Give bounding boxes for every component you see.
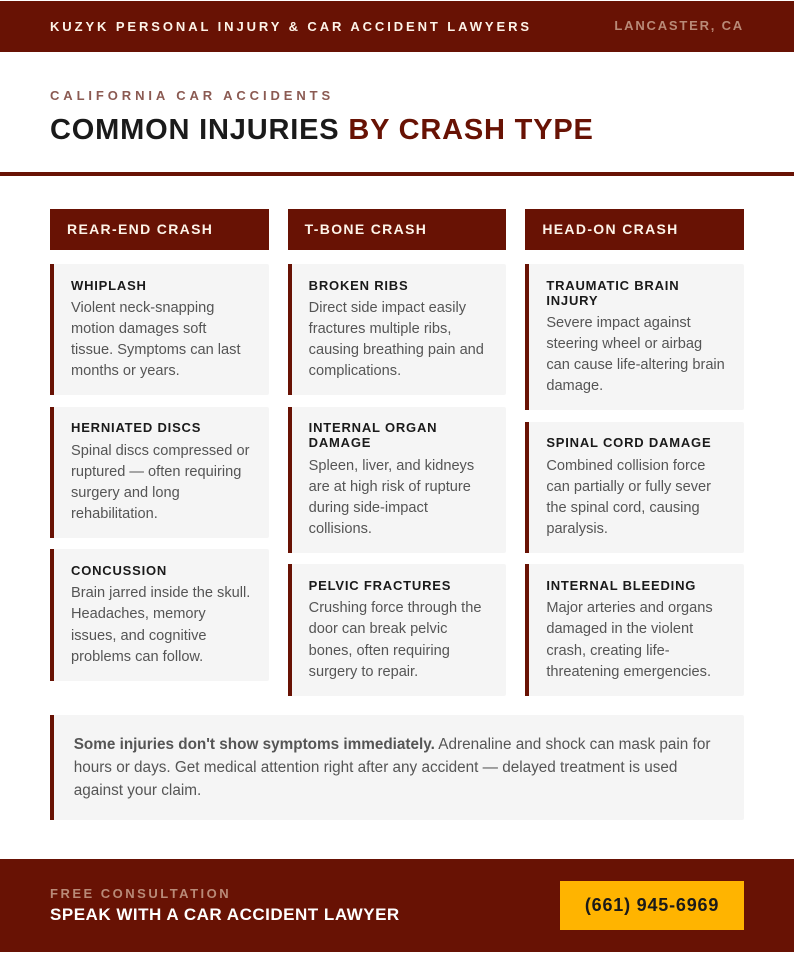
phone button	[560, 881, 744, 930]
footer eyebrow: FREE CONSULTATION	[50, 886, 231, 901]
card: whiplash	[50, 264, 269, 395]
card: herniated discs: HERNIATED DISCS	[71, 420, 201, 435]
card: pelvic fractures: PELVIC FRACTURES	[309, 578, 451, 593]
column heading: t-bone	[288, 209, 506, 250]
card: pelvic fractures: bones, often requiring	[309, 643, 450, 659]
column heading: head-on	[525, 209, 744, 250]
card: spinal cord damage: paralysis.	[546, 521, 608, 537]
card: herniated discs: Spinal discs compressed or	[71, 443, 249, 459]
card: concussion: CONCUSSION	[71, 563, 167, 578]
card: internal organ damage: DAMAGE	[309, 435, 371, 450]
card: traumatic brain injury: Severe impact against	[546, 315, 691, 331]
card: traumatic brain injury: damage.	[546, 378, 603, 394]
column heading: rear-end: REAR-END CRASH	[67, 221, 213, 237]
card: concussion: problems can follow.	[71, 649, 203, 665]
callout: Some injuries don't show symptoms immediately. Adrenaline and shock can mask pain for	[74, 736, 710, 753]
callout: against your claim.	[74, 782, 201, 799]
card: herniated discs	[50, 407, 269, 538]
card: spinal cord damage: Combined collision force	[546, 458, 705, 474]
title rule	[0, 172, 794, 176]
card: spinal cord damage: the spinal cord, causing	[546, 500, 700, 516]
eyebrow: CALIFORNIA CAR ACCIDENTS	[50, 88, 334, 103]
card: whiplash: tissue. Symptoms can last	[71, 342, 241, 358]
card: herniated discs: surgery and long	[71, 485, 180, 501]
card: whiplash: motion damages soft	[71, 321, 206, 337]
card: internal organ damage	[288, 407, 506, 553]
card: herniated discs: ruptured — often requiring	[71, 464, 241, 480]
card: concussion: Headaches, memory	[71, 606, 206, 622]
card: internal bleeding: crash, creating life-	[546, 643, 670, 659]
card: broken ribs: Direct side impact easily	[309, 300, 466, 316]
card: internal organ damage: are at high risk of rupture	[309, 479, 471, 495]
title: COMMON INJURIES BY CRASH TYPE	[50, 114, 594, 146]
column: head-on crash	[525, 209, 744, 696]
card: broken ribs: BROKEN RIBS	[309, 278, 408, 293]
card: concussion: issues, and cognitive	[71, 628, 206, 644]
card: traumatic brain injury: can cause life-altering brain	[546, 357, 725, 373]
card: herniated discs: rehabilitation.	[71, 506, 158, 522]
column heading: t-bone: T-BONE CRASH	[305, 221, 427, 237]
card: internal bleeding: damaged in the violent	[546, 621, 693, 637]
card: broken ribs	[288, 264, 506, 395]
card: whiplash: months or years.	[71, 363, 180, 379]
column: t-bone crash	[288, 209, 506, 696]
card: whiplash: Violent neck-snapping	[71, 300, 214, 316]
column heading: rear-end	[50, 209, 269, 250]
callout: hours or days. Get medical attention right after any accident — delayed treatment is used	[74, 759, 677, 776]
card: internal organ damage: INTERNAL ORGAN	[309, 420, 437, 435]
callout	[50, 715, 744, 820]
card: internal bleeding: threatening emergencies.	[546, 664, 711, 680]
card: traumatic brain injury: TRAUMATIC BRAIN	[546, 278, 679, 293]
column heading: head-on: HEAD-ON CRASH	[542, 221, 679, 237]
footer bar	[0, 859, 794, 952]
footer heading: SPEAK WITH A CAR ACCIDENT LAWYER	[50, 905, 400, 924]
card: broken ribs: causing breathing pain and	[309, 342, 484, 358]
card: concussion	[50, 549, 269, 681]
card: internal bleeding	[525, 564, 744, 696]
card: spinal cord damage: can partially or fully sever	[546, 479, 711, 495]
card: broken ribs: fractures multiple ribs,	[309, 321, 451, 337]
card: traumatic brain injury: steering wheel or airbag	[546, 336, 702, 352]
card: pelvic fractures: door can break pelvic	[309, 621, 447, 637]
card: spinal cord damage: SPINAL CORD DAMAGE	[546, 435, 711, 450]
header bar	[0, 1, 794, 52]
card: broken ribs: complications.	[309, 363, 401, 379]
card: traumatic brain injury: INJURY	[546, 293, 598, 308]
card: pelvic fractures: Crushing force through the	[309, 600, 481, 616]
card: pelvic fractures: surgery to repair.	[309, 664, 418, 680]
card: spinal cord damage	[525, 422, 744, 553]
phone button: (661) 945-6969	[585, 895, 719, 915]
card: internal bleeding: INTERNAL BLEEDING	[546, 578, 696, 593]
card: concussion: Brain jarred inside the skull.	[71, 585, 250, 601]
firm name: KUZYK PERSONAL INJURY & CAR ACCIDENT LAWYERS	[50, 19, 532, 34]
card: internal organ damage: during side-impact	[309, 500, 428, 516]
card: internal bleeding: Major arteries and organs	[546, 600, 713, 616]
card: internal organ damage: Spleen, liver, and kidneys	[309, 458, 474, 474]
card: internal organ damage: collisions.	[309, 521, 372, 537]
location: LANCASTER, CA	[614, 18, 744, 33]
card: traumatic brain injury	[525, 264, 744, 410]
card: whiplash: WHIPLASH	[71, 278, 147, 293]
column: rear-end crash	[50, 209, 269, 681]
card: pelvic fractures	[288, 564, 506, 696]
